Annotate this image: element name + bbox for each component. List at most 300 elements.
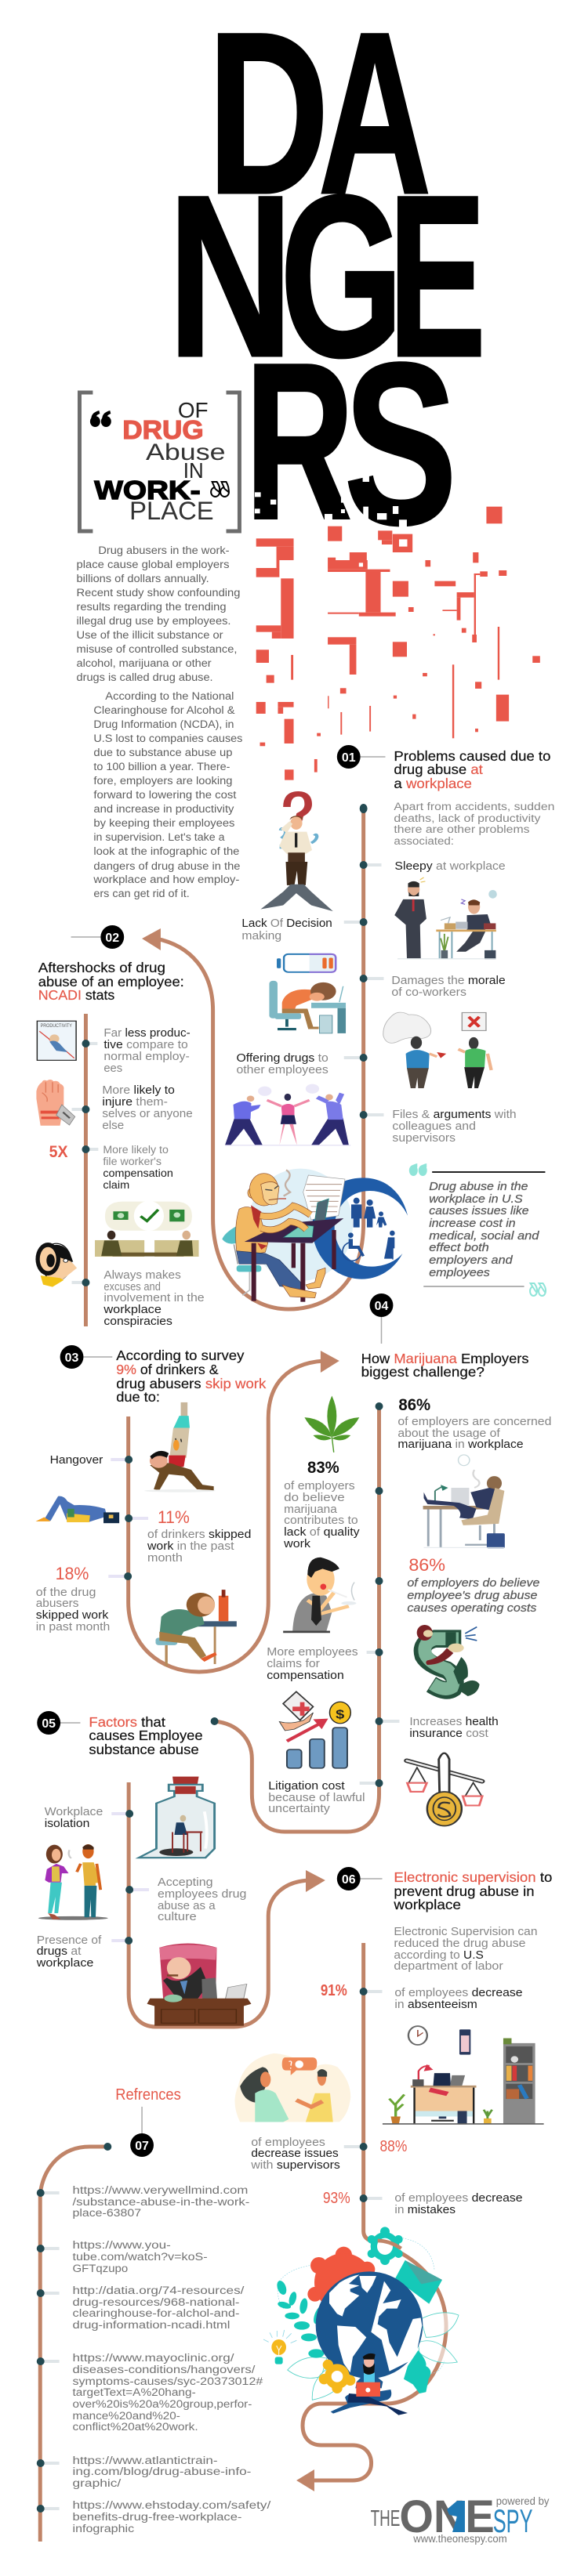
arrow path: section 03 to 04	[129, 1351, 339, 1672]
stat: 88%: of employees	[251, 2136, 325, 2149]
text block: introduction paragraph 2: look at the infographic of the	[93, 845, 240, 857]
arrow path: section 05 to 06	[129, 1782, 325, 2027]
section 05: factors	[36, 1711, 246, 1970]
stat: 18%: skipped work	[36, 1608, 109, 1622]
label: fights and arguments	[392, 1108, 517, 1145]
text: likely to injure: injure them-	[102, 1095, 168, 1109]
stat: 83%	[283, 1459, 360, 1550]
icon: balance scales with coin	[407, 1753, 482, 1825]
text: presence of drugs: workplace	[36, 1956, 93, 1970]
label: offering drugs: other employees	[236, 1063, 328, 1076]
reference 5: https://www.atlantictrain-	[73, 2454, 218, 2466]
icon: conversation with supervisor	[234, 2053, 350, 2122]
reference 3: clearinghouse-for-alchol-and-	[73, 2306, 240, 2319]
text: workplace isolation: isolation	[45, 1817, 89, 1830]
text block: introduction paragraph 2: Clearinghouse for Alcohol &	[93, 704, 235, 716]
text block: introduction paragraph 2: to 100 billion a year. There-	[93, 760, 230, 772]
heading 03: According to survey	[116, 1348, 244, 1363]
number badge 06	[337, 1867, 383, 1890]
stat: 86% operating costs: causes operating costs	[407, 1601, 537, 1615]
stat: 93%: 93%	[323, 2190, 350, 2207]
text: health insurance: Increases health	[409, 1715, 499, 1728]
stat: 83%: contributes to	[284, 1514, 358, 1527]
text: litigation cost: because of lawful	[268, 1791, 365, 1804]
number badge 04: 04	[375, 1300, 388, 1313]
icon: stressed monkey at desk	[222, 1170, 345, 1302]
stat: 86% operating costs: 86%	[408, 1555, 445, 1575]
stat: 5X: 5X	[49, 1143, 68, 1161]
text: compensation claim: compensation	[103, 1167, 173, 1179]
text block: introduction paragraph 2: dangers of drug abuse in the	[93, 859, 241, 872]
heading 03: drug abusers skip work	[116, 1376, 266, 1391]
stat: 83%: of employers	[284, 1479, 355, 1492]
timeline nodes 01	[344, 804, 383, 1119]
label: offering drugs: Offering drugs to	[236, 1051, 328, 1065]
desk	[245, 1218, 343, 1302]
stat: 11%: 11%	[158, 1507, 190, 1527]
stat: 86% operating costs: employee's drug abuse	[407, 1589, 537, 1602]
text: excuses and conspiracies: workplace	[103, 1303, 162, 1316]
logo wordmark	[371, 2492, 533, 2542]
stat: 88%	[250, 2136, 408, 2172]
connector lines and arrows between sections	[40, 809, 446, 2542]
heading 02: Aftershocks of drug	[38, 960, 165, 975]
heading: references: Refrences	[115, 2086, 181, 2104]
section 06: electronic supervision	[250, 1867, 552, 2216]
icon: green leaf branch	[275, 2279, 325, 2358]
label: fights and arguments: Files & arguments with	[392, 1108, 517, 1121]
text block: introduction paragraph 1: misuse of controlled substance,	[77, 642, 237, 655]
reference 4: over%20is%20a%20group,perfor-	[73, 2397, 252, 2410]
reference 2: https://www.you-	[73, 2238, 171, 2251]
heading 06: workplace	[393, 1897, 461, 1912]
reference 6: benefits-drug-free-workplace-	[73, 2510, 242, 2523]
reference 5	[73, 2454, 252, 2489]
subtitle text: WORK-	[94, 476, 201, 505]
reference 4: targetText=A%20hang-	[73, 2386, 196, 2398]
text: compensation claims: compensation	[267, 1669, 344, 1682]
text block: introduction paragraph 1: results regarding the trending	[77, 600, 227, 613]
heading 01: drug abuse at	[394, 762, 483, 777]
text: workplace isolation: Workplace	[45, 1805, 103, 1818]
heading 01	[394, 748, 550, 791]
heading 04	[361, 1351, 529, 1380]
stat: 91%	[321, 1982, 523, 2011]
powered by: powered by	[496, 2495, 549, 2507]
laptop	[312, 1199, 328, 1236]
description 06: according to U.S	[394, 1948, 484, 1962]
text block: introduction paragraph 1: Use of the illicit substance or	[77, 628, 223, 641]
stat: 18%: 18%	[56, 1564, 89, 1583]
text: accepting culture: Accepting	[158, 1876, 213, 1889]
title: DANGERS: S	[344, 316, 457, 573]
cigarette smoke	[284, 1170, 290, 1196]
quote text: medical, social and	[429, 1229, 539, 1243]
subtitle text	[94, 398, 226, 525]
text block: introduction paragraph 1: billions of dollars annually.	[77, 572, 209, 584]
timeline nodes 02	[72, 1040, 98, 1286]
icon: man smoking	[283, 1558, 356, 1633]
icon: man in bottle	[139, 1777, 215, 1858]
stat: 86% operating costs: of employers do believe	[407, 1576, 539, 1590]
text: excuses and conspiracies: involvement in the	[103, 1291, 205, 1304]
stat: 93%: in mistakes	[394, 2203, 456, 2216]
reference 3	[73, 2284, 245, 2331]
title: DANGERS: G	[280, 148, 403, 405]
description 06: Electronic Supervision can	[394, 1925, 537, 1938]
text: accepting culture: abuse as a	[158, 1899, 216, 1912]
quote text: causes issues like	[429, 1204, 529, 1217]
heading 05: causes Employee	[89, 1728, 203, 1743]
heading 04: biggest challenge?	[361, 1364, 485, 1380]
heading 06	[393, 1869, 552, 1912]
logo wordmark: THE	[371, 2506, 400, 2531]
icon: man with big ear	[35, 1243, 77, 1287]
section 03: skip work	[36, 1345, 266, 1634]
text: excuses and conspiracies: Always makes	[103, 1268, 181, 1282]
text: litigation cost: uncertainty	[268, 1802, 330, 1815]
reference 4: https://www.mayoclinic.org/	[73, 2351, 234, 2364]
text block: introduction paragraph 1: illegal drug use by employees.	[77, 614, 230, 627]
icon: cannabis leaf	[304, 1396, 359, 1453]
text: far less productive: tive compare to	[103, 1038, 188, 1051]
timeline: section 02	[84, 1014, 88, 1326]
description 01: Apart from accidents, sudden	[394, 800, 554, 812]
reference 1: /substance-abuse-in-the-work-	[73, 2195, 250, 2208]
text: health insurance	[409, 1715, 499, 1740]
text block: introduction paragraph 2: and increase in productivity	[93, 802, 234, 815]
number badge 05	[37, 1711, 80, 1735]
logo: TheOneSpy	[371, 2492, 549, 2545]
text: accepting culture	[158, 1876, 246, 1923]
text: presence of drugs: drugs at	[37, 1945, 82, 1958]
icon: fist and razor	[36, 1080, 75, 1126]
section 04: marijuana	[267, 1351, 551, 1815]
heading 03: 9% of drinkers &	[116, 1362, 219, 1377]
arms	[260, 1206, 310, 1230]
stat: 93%: of employees decrease	[394, 2191, 523, 2205]
reference 2	[73, 2238, 208, 2274]
description 01: there are other problems	[394, 823, 530, 835]
stat: 86% concerned: of employers are concerned	[397, 1415, 551, 1428]
quote text: workplace in U.S	[429, 1192, 523, 1206]
icon: bottle riding hungover man	[144, 1402, 216, 1492]
section 01: problems	[236, 745, 554, 1145]
icon: family and disability circle	[249, 1169, 408, 1281]
heading 02: NCADI stats	[38, 987, 114, 1003]
icon: globe with person, gears and leaves	[263, 2227, 459, 2415]
quote text	[429, 1180, 539, 1279]
feet	[282, 1268, 325, 1298]
description 01: associated:	[394, 834, 454, 847]
icon: confused man with question marks	[279, 794, 317, 863]
text: compensation claims: claims for	[267, 1657, 320, 1670]
title: DANGERS: E	[388, 148, 486, 405]
label: lack of decision: Lack Of Decision	[241, 917, 332, 930]
heading 04: How Marijuana Employers	[361, 1351, 529, 1366]
arrow path: section 01 to 02	[142, 809, 364, 1309]
text: compensation claim	[103, 1143, 173, 1191]
reference 4: conflict%20at%20work.	[73, 2420, 198, 2433]
timeline nodes 05	[111, 1717, 219, 1945]
text: far less productive: normal employ-	[103, 1050, 190, 1063]
subtitle text: Abuse	[146, 440, 226, 465]
text block: introduction paragraph 2: workplace and how employ-	[93, 873, 240, 885]
quote block	[409, 1163, 546, 1296]
text: litigation cost	[268, 1779, 365, 1815]
text block: introduction paragraph 1: Recent study show confounding	[77, 586, 240, 599]
reference 5: ing.com/blog/drug-abuse-info-	[73, 2465, 252, 2477]
text block: introduction paragraph 1: alcohol, marijuana or other	[77, 657, 212, 669]
timeline nodes 03	[108, 1456, 148, 1580]
text: excuses and conspiracies: excuses and	[103, 1280, 161, 1293]
heading 06: prevent drug abuse in	[394, 1883, 535, 1899]
icon: light bulb	[263, 2330, 296, 2364]
text: compensation claim: More likely to	[103, 1143, 169, 1156]
quote text: effect both	[429, 1241, 489, 1254]
reference 2: GFTqzupo	[73, 2262, 128, 2274]
icon: fighting employees	[225, 1084, 350, 1145]
icon: boss relaxing at desk	[147, 1944, 251, 2026]
icon: teal oak leaf	[404, 2350, 430, 2393]
icon: opening quote	[90, 411, 111, 427]
icon: closing quote	[211, 482, 229, 497]
stat: 86% concerned: about the usage of	[397, 1427, 501, 1440]
reference 4: mance%20and%20-	[73, 2409, 180, 2422]
text: likely to injure: selves or anyone	[102, 1107, 193, 1120]
stat: 83%: do believe	[284, 1491, 345, 1504]
description 01	[394, 800, 554, 847]
text block: introduction paragraph 2: by keeping their employees	[93, 816, 234, 829]
reference 4	[73, 2351, 263, 2433]
text: excuses and conspiracies: conspiracies	[103, 1315, 172, 1328]
reference 6	[73, 2498, 270, 2534]
number badge 07	[130, 2107, 154, 2157]
text: litigation cost: Litigation cost	[268, 1779, 346, 1793]
stat: 83%: 83%	[307, 1459, 339, 1477]
number badge 03: 03	[65, 1351, 79, 1365]
text: accepting culture: culture	[158, 1910, 197, 1923]
section 02: aftershocks	[38, 925, 205, 1328]
icon: woman relaxing at desk	[423, 1455, 505, 1548]
label: fights and arguments: colleagues and	[392, 1120, 476, 1133]
text block: introduction paragraph 2: According to the National	[105, 689, 234, 702]
quote text: increase cost in	[429, 1217, 516, 1230]
icon: globe	[316, 2271, 423, 2379]
heading 03	[116, 1348, 266, 1405]
number badge 01	[337, 745, 385, 769]
icon: man legs on diverging road arrows	[260, 862, 333, 911]
reference 5: graphic/	[73, 2477, 121, 2489]
timeline nodes 07	[37, 2143, 111, 2513]
label: hangover: Hangover	[50, 1453, 103, 1467]
subtitle text: PLACE	[129, 497, 214, 525]
icon: man lying on floor	[35, 1496, 119, 1523]
label: morale: Damages the morale	[391, 974, 506, 987]
reference 1: https://www.verywellmind.com	[73, 2183, 248, 2196]
text: compensation claim: file worker's	[103, 1155, 162, 1167]
title: DANGERS: N	[168, 148, 293, 405]
text: health insurance: insurance cost	[409, 1727, 489, 1740]
timeline nodes 04	[360, 1402, 399, 1787]
subtitle text: OF	[178, 398, 209, 422]
reference 2: tube.com/watch?v=koS-	[73, 2250, 208, 2263]
heading 01: a workplace	[394, 776, 472, 791]
torso	[236, 1207, 268, 1255]
number badge 03	[60, 1345, 112, 1369]
icon: first aid, coin and bar chart: $	[336, 1708, 344, 1721]
stat: 18%	[36, 1564, 110, 1634]
number badge 02: 02	[105, 932, 119, 945]
number badge 01: 01	[342, 751, 356, 765]
text: compensation claims: More employees	[267, 1645, 358, 1659]
description 06	[394, 1925, 537, 1973]
text: far less productive: Far less produc-	[103, 1026, 191, 1040]
head	[248, 1174, 286, 1206]
icon: low battery and tired employee	[269, 954, 346, 1033]
text block: introduction paragraph 2: Drug Information (NCDA), in	[93, 718, 234, 730]
icon: red gear	[307, 2247, 375, 2312]
stat: 86% operating costs	[407, 1555, 539, 1615]
icon: sleepy at workplace	[394, 877, 497, 959]
heading 02	[38, 960, 184, 1003]
label: sleepy: Sleepy at workplace	[394, 859, 506, 873]
icon: line leaves	[288, 2313, 459, 2400]
stat: 11%: month	[147, 1551, 183, 1565]
quote text: employees	[429, 1266, 490, 1279]
heading 05: substance abuse	[89, 1742, 199, 1757]
arrow path: section 06 to 07	[296, 1943, 446, 2491]
stat: 18%: in past month	[36, 1620, 110, 1634]
icon: closing quote mint	[530, 1283, 546, 1296]
icon: dotted orbit lines	[278, 2238, 445, 2374]
stat: 86% concerned: marijuana in workplace	[397, 1438, 524, 1451]
quote text: Drug abuse in the	[429, 1180, 528, 1193]
description 06: department of labor	[394, 1959, 503, 1973]
trousers	[237, 1251, 300, 1290]
quote text: employers and	[429, 1254, 513, 1267]
stat: 91%: of employees decrease	[394, 1986, 523, 1999]
reference 4: symptoms-causes/syc-20373012#	[73, 2375, 263, 2387]
timeline nodes 06	[344, 1988, 383, 2202]
icon: productivity poster: PRODUCTIVITY	[41, 1024, 72, 1029]
logo wordmark: ONE	[399, 2492, 495, 2542]
text block: introduction paragraph 2: fore, employers are looking	[93, 774, 232, 787]
subtitle text: IN	[183, 458, 204, 483]
icon: productivity poster	[37, 1021, 76, 1060]
timeline: section 04	[215, 1406, 379, 1832]
text block: introduction paragraph 2: ers can get rid of it.	[93, 887, 190, 899]
icon: business meeting with money	[95, 1201, 199, 1257]
reference 3: drug-resources/968-national-	[73, 2296, 240, 2308]
text block: introduction paragraph 2: U.S lost to companies causes	[93, 732, 242, 744]
heading 03: due to:	[116, 1389, 160, 1405]
label: morale	[391, 974, 506, 999]
icon: person with laptop	[331, 2353, 408, 2415]
reference 3: drug-information-ncadi.html	[73, 2318, 230, 2331]
stat: 86% concerned: 86%	[398, 1396, 431, 1414]
subtitle text: DRUG	[122, 415, 204, 444]
website: www.theonespy.com	[412, 2532, 507, 2545]
title: DANGERS	[168, 0, 486, 573]
stat: 88%: 88%	[380, 2138, 408, 2155]
description 06: reduced the drug abuse	[394, 1937, 526, 1950]
text block: introduction paragraph 2	[93, 689, 242, 899]
heading 06: Electronic supervision to	[394, 1869, 552, 1885]
label: fights and arguments: supervisors	[392, 1131, 456, 1145]
icon: couple smoking	[38, 1844, 108, 1920]
icon: first aid, coin and bar chart	[279, 1691, 350, 1768]
text block: introduction paragraph 2: forward to lowering the cost	[93, 788, 237, 801]
icon: smoking colleague and refusal	[383, 1012, 492, 1088]
stat: 83%: work	[283, 1537, 311, 1550]
text block: introduction paragraph 2: due to substance abuse up	[93, 746, 233, 758]
text: compensation claims	[267, 1645, 358, 1682]
stat: 83%: marijuana	[284, 1503, 337, 1516]
text: accepting culture: employees drug	[158, 1887, 246, 1901]
text: presence of drugs: Presence of	[37, 1934, 102, 1947]
label: lack of decision: making	[241, 929, 281, 942]
icon: teal gear	[368, 2227, 403, 2265]
stat: 18%: abusers	[36, 1597, 78, 1610]
stat: 86% concerned	[397, 1396, 551, 1451]
label: offering drugs	[236, 1051, 328, 1076]
description 01: deaths, lack of productivity	[394, 812, 540, 824]
paper stack	[303, 1175, 345, 1220]
reference 3: http://datia.org/74-resources/	[73, 2284, 245, 2296]
number badge 06: 06	[342, 1873, 356, 1887]
reference 4: diseases-conditions/hangovers/	[73, 2363, 255, 2375]
subtitle bracket block	[79, 393, 239, 531]
text block: introduction paragraph 2: in supervision. Let's take a	[93, 830, 225, 843]
text: far less productive: ees	[103, 1062, 122, 1075]
text: workplace isolation	[45, 1805, 103, 1830]
heading 01: Problems caused due to	[394, 748, 550, 764]
icon: office with absent sign	[383, 2026, 544, 2125]
icon: man hugging dollar sign	[417, 1625, 480, 1696]
pixel erosion on title letters	[251, 474, 407, 531]
number badge 02	[71, 925, 124, 949]
text: far less productive	[103, 1026, 191, 1075]
references section	[37, 2086, 270, 2534]
icon: envelope	[395, 2260, 442, 2304]
reference 1	[73, 2183, 250, 2219]
reference 1: place-63807	[73, 2206, 141, 2219]
stat: 11%	[147, 1507, 251, 1565]
text: likely to injure	[102, 1084, 193, 1132]
text: compensation claim: claim	[103, 1178, 129, 1191]
stat: 93%	[323, 2190, 523, 2216]
title: DANGERS: R	[245, 316, 354, 573]
stat: 11%: work in the past	[147, 1539, 234, 1553]
bracket frame	[79, 393, 239, 531]
reference 6: https://www.ehstoday.com/safety/	[73, 2498, 270, 2511]
stat: 83%: lack of quality	[284, 1525, 360, 1539]
label: morale: of co-workers	[391, 986, 466, 999]
timeline: references	[40, 2147, 107, 2542]
text: likely to injure: else	[102, 1119, 124, 1132]
icon: opening quote mint	[409, 1163, 427, 1176]
stat: 91%: 91%	[321, 1982, 347, 1999]
number badge 05: 05	[42, 1717, 56, 1731]
chair	[222, 1226, 261, 1295]
text: excuses and conspiracies	[103, 1268, 205, 1328]
icon: yellow gear	[319, 2360, 355, 2393]
heading 05: Factors that	[89, 1714, 165, 1730]
stat: 11%: of drinkers skipped	[147, 1528, 251, 1541]
text block: introduction paragraph 1: place cause global employers	[77, 558, 230, 570]
pixel fragments dissolving from the title	[256, 507, 540, 780]
